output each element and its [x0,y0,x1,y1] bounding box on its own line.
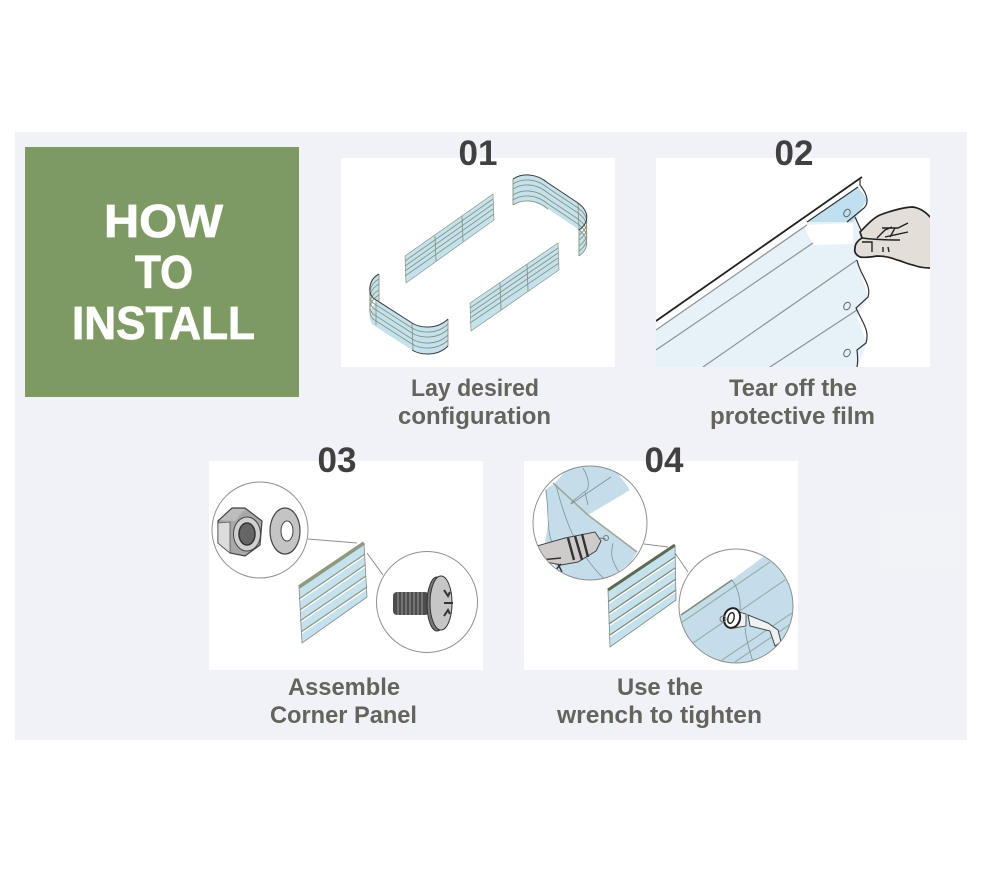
lower straight panel [470,243,559,331]
peeled film highlight [803,223,853,245]
exposed blue corner [807,187,867,222]
caption step 02: Tear off the [729,375,857,402]
corner panel slats [608,545,676,647]
title block: HOW [104,195,224,247]
hand [855,207,931,268]
step number 03: 03 [318,441,356,480]
corner panel slats [299,543,367,643]
lower left curved panel [370,274,448,354]
caption step 01: Lay desired [411,375,539,402]
caption step 02 [710,375,875,430]
detail circle: wrench [678,548,794,664]
title block [25,147,299,397]
caption step 01 [398,375,551,430]
leader lines [644,544,688,572]
upper right curved panel [513,175,587,256]
step 03 panel [209,461,483,670]
caption step 04: Use the [617,674,703,701]
step number 01: 01 [459,134,497,173]
title block: INSTALL [72,297,255,349]
step 02 panel [656,158,931,367]
caption step 04: wrench to tighten [556,702,762,729]
detail circle: screw [376,552,478,652]
film-covered sheet [656,187,868,367]
caption step 03 [270,674,417,729]
caption step 01: configuration [398,403,551,430]
step 04 panel [524,461,800,670]
caption step 04 [556,674,762,729]
upper straight panel [405,194,494,283]
title block: TO [135,246,193,298]
caption step 02: protective film [710,403,875,430]
detail circle: nut and washer [212,482,308,578]
step number 04: 04 [645,441,684,480]
sheet corrugation lines [656,225,857,367]
caption step 03: Assemble [288,674,400,701]
detail circle: drill [530,464,647,582]
step number 02: 02 [775,134,813,173]
background panel [15,132,967,740]
leader lines [308,539,383,575]
top rail [656,177,862,321]
faint smudge on the right [880,510,960,570]
caption step 03: Corner Panel [270,702,417,729]
wavy edge [847,178,869,367]
step 01 panel [341,158,615,367]
rivet holes [843,208,851,358]
